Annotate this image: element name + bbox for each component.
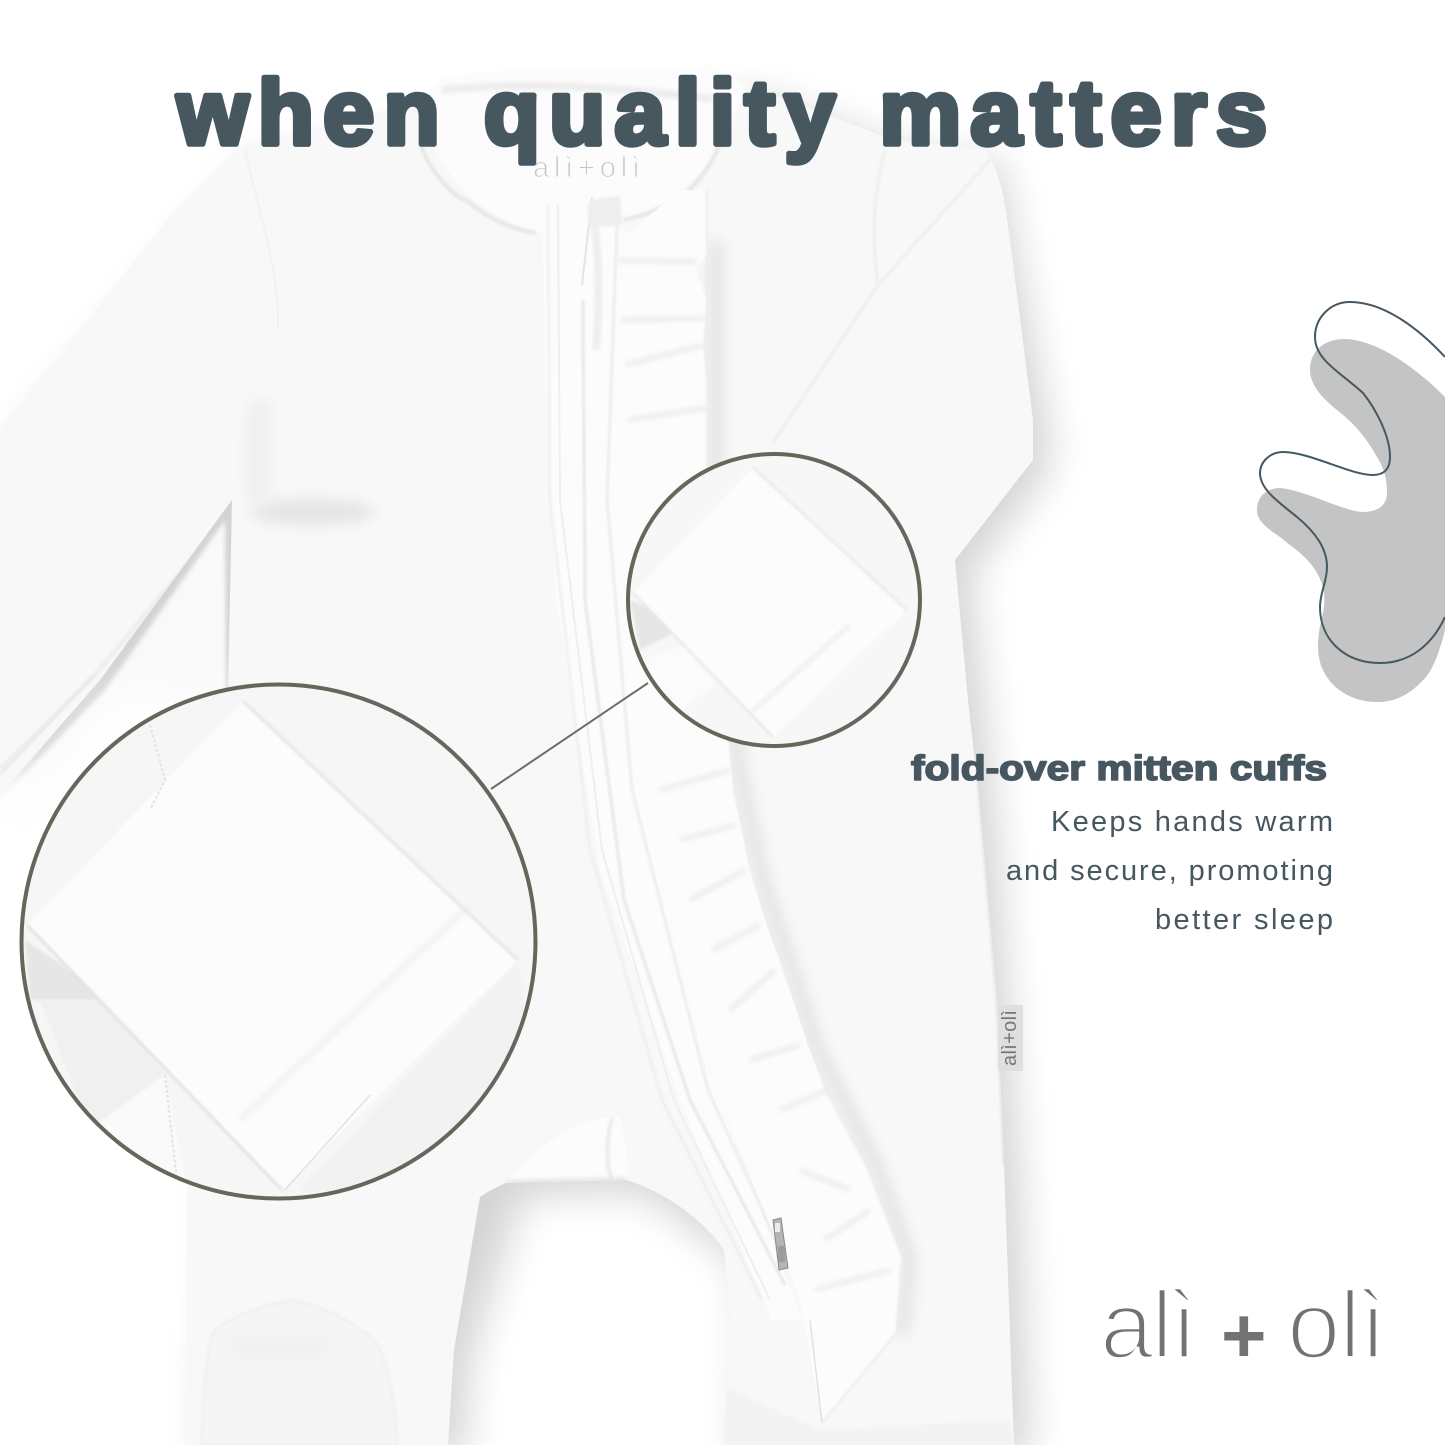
blob outline	[1260, 302, 1445, 663]
connector line between circles	[491, 683, 648, 789]
large magnifier: mitten cuff close-up	[22, 684, 536, 1200]
grey blob	[1257, 339, 1445, 702]
wedge under sleeve stays mostly white	[0, 520, 226, 1000]
shaded side seam	[977, 784, 1004, 1164]
garment body silhouette	[0, 65, 1033, 1445]
feature description line 3: better sleep	[1155, 904, 1333, 936]
photo: white ruffled zip sleepsuit	[0, 65, 1049, 1445]
garment shading and construction details	[0, 65, 1014, 1445]
brand logo: alì	[1100, 1272, 1195, 1379]
decorative blob	[1257, 302, 1445, 702]
feature text block	[911, 749, 1333, 936]
feature description line 1: Keeps hands warm	[1051, 806, 1333, 838]
brand logo: +	[1221, 1291, 1267, 1379]
small circle fabric	[630, 466, 906, 740]
collar	[420, 65, 745, 233]
garment drop shadow	[16, 96, 1049, 1445]
title: when quality matters	[176, 62, 1267, 164]
brand logo: olì	[1287, 1272, 1385, 1379]
feature heading: fold-over mitten cuffs	[911, 749, 1327, 788]
foot cuff band	[724, 1387, 1014, 1445]
fold band of cuff	[240, 905, 470, 1120]
ruffle	[650, 190, 901, 1332]
large circle ring	[22, 684, 536, 1198]
zip placket	[542, 196, 802, 1320]
foot patch	[202, 1300, 397, 1445]
crotch fold	[506, 1117, 627, 1183]
cuff	[78, 974, 132, 1031]
small magnifier: mitten cuff	[628, 454, 920, 746]
side tag with logo: alì+olì	[999, 1010, 1021, 1066]
cuff	[650, 608, 690, 633]
small circle ring	[628, 454, 920, 746]
icon: zipper pull	[773, 1218, 788, 1270]
feature description line 2: and secure, promoting	[1006, 855, 1333, 887]
neck label logo: alì+olì	[533, 152, 640, 184]
large circle fabric	[22, 684, 536, 1200]
shadow cast by ruffle	[716, 240, 910, 1335]
